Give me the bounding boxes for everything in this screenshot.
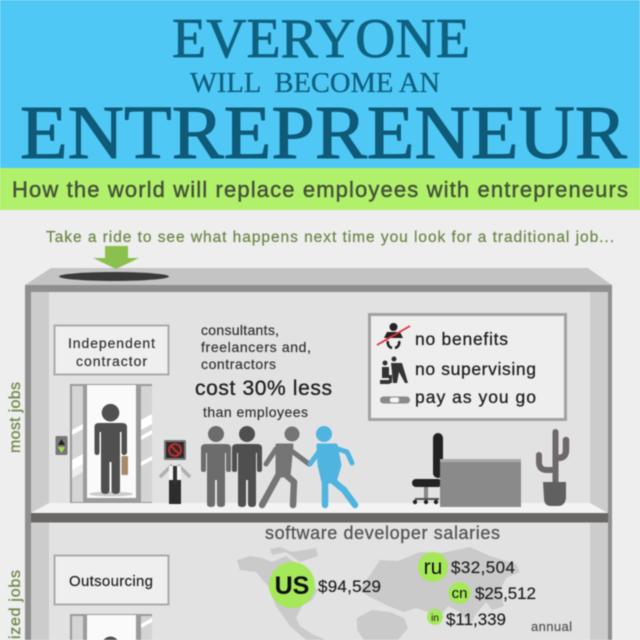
salary: India: $11,339 — [446, 610, 506, 629]
text: pay as you go: pay as you go — [415, 387, 536, 407]
side label: most jobs: most jobs — [7, 382, 24, 453]
text: who costs less: consultants, — [201, 322, 279, 338]
person: blue contractor shaking hands — [310, 426, 355, 505]
intro sentence: Take a ride to see what happens next time you look for a traditional job... — [46, 229, 614, 246]
text: no supervising: no supervising — [415, 359, 536, 379]
floor slab — [31, 503, 608, 522]
salary: Russia: ru — [424, 556, 442, 579]
sign: independent contractor — [54, 326, 168, 374]
panel: contractor conditions — [370, 314, 566, 420]
text: no benefits: no benefits — [415, 329, 508, 349]
header band: title — [0, 0, 640, 175]
sign: outsourcing: Outsourcing — [69, 573, 153, 590]
note: annual: annual — [531, 619, 572, 634]
heading: software developer salaries: software developer salaries — [265, 523, 500, 543]
salary: India: in — [431, 613, 439, 624]
title line: everyone: EVERYONE — [172, 8, 470, 70]
text: who costs less: than employees — [203, 404, 308, 420]
building — [25, 246, 612, 640]
world map — [237, 547, 520, 640]
salary: US — [269, 562, 381, 608]
office chair — [412, 433, 443, 504]
turnstile kiosk with no-entry screen — [161, 440, 189, 504]
person: walking employee shaking hands — [262, 426, 309, 505]
desk — [440, 459, 521, 507]
person in elevator with briefcase — [94, 404, 128, 494]
person: employee one — [201, 426, 231, 507]
sign: outsourcing — [54, 556, 168, 604]
salary: US: US — [275, 572, 309, 600]
person: employee two — [232, 426, 262, 507]
sign: independent contractor: Independent — [68, 335, 155, 351]
icon: pills — [380, 396, 410, 404]
sign: independent contractor: contractor — [76, 353, 147, 369]
text: who costs less: freelancers and, — [201, 339, 311, 355]
roof — [25, 268, 612, 292]
salary: US: $94,529 — [318, 577, 381, 596]
building walls — [25, 292, 612, 640]
text: who costs less — [195, 322, 332, 420]
salary: China — [448, 582, 536, 604]
subtitle text: How the world will replace employees with entrepreneurs — [12, 177, 628, 202]
text: who costs less: cost 30% less — [195, 377, 332, 400]
salary: Russia — [418, 552, 515, 582]
title line: entrepreneur: ENTREPRENEUR — [20, 91, 627, 175]
elevator call button — [56, 436, 68, 455]
salary: Russia: $32,504 — [451, 558, 515, 577]
elevator: lower floor — [70, 614, 152, 640]
text: who costs less: contractors — [201, 356, 276, 372]
arrow pointing into the roof hatch — [93, 246, 139, 269]
salary: China: cn — [452, 585, 467, 602]
subtitle band — [0, 168, 640, 210]
icon: supervisor and seated worker — [380, 356, 408, 384]
salary: China: $25,512 — [475, 584, 536, 603]
side label: specialized jobs: ized jobs — [7, 570, 24, 639]
icon: crossed-out baby, no benefits — [377, 323, 410, 348]
title line: will become an: WILL BECOME AN — [190, 67, 440, 99]
potted cactus — [539, 432, 566, 506]
elevator: upper floor — [70, 384, 152, 503]
